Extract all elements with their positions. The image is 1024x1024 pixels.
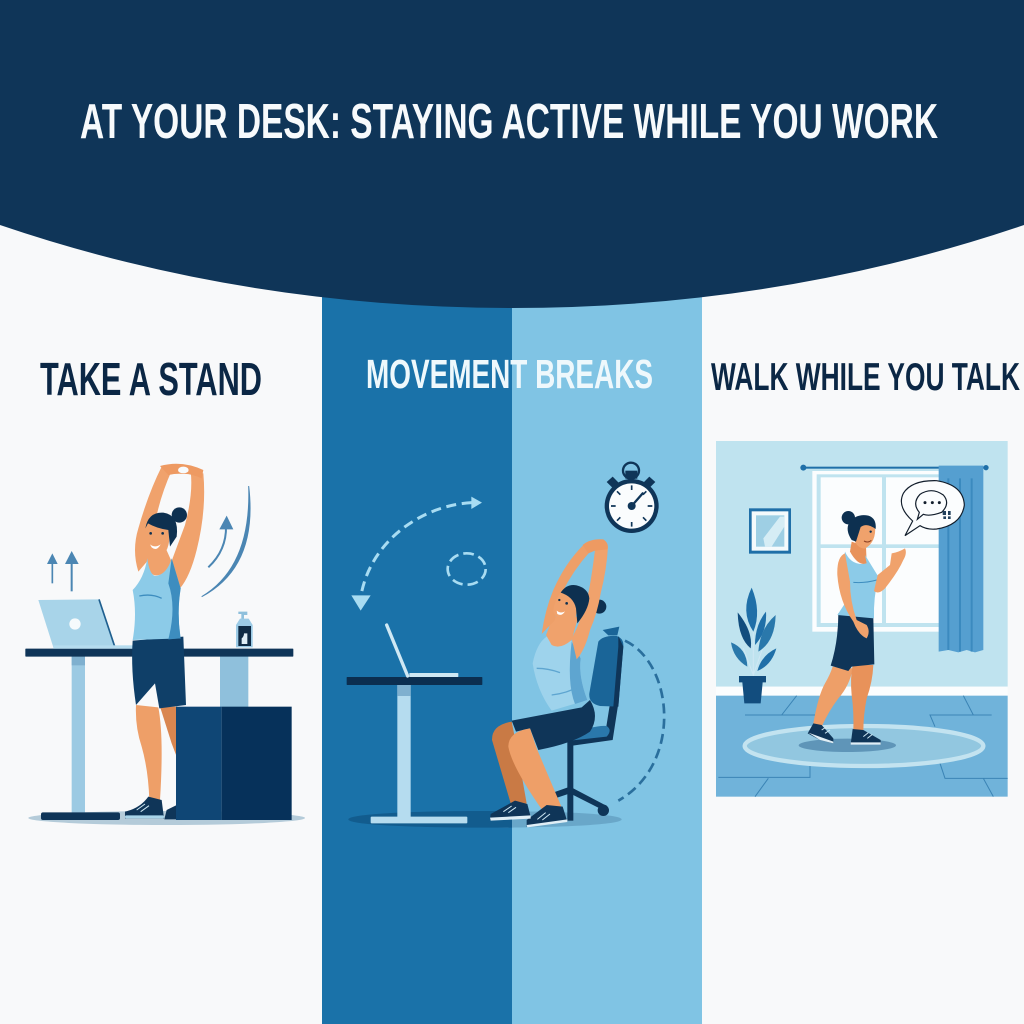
shorts xyxy=(132,637,186,708)
curtain rod xyxy=(800,465,989,471)
laptop xyxy=(387,625,458,677)
shorts xyxy=(831,613,874,671)
back leg xyxy=(160,707,177,758)
icon: dashed return arc xyxy=(618,641,664,801)
left arm xyxy=(542,545,590,634)
shoes xyxy=(125,797,164,818)
office chair xyxy=(537,627,623,821)
shorts xyxy=(512,700,595,750)
woman walking xyxy=(808,511,906,745)
panel: movement breaks dark half xyxy=(322,250,512,1024)
storage cube xyxy=(176,707,292,820)
head xyxy=(853,520,875,549)
icon: stopwatch xyxy=(605,463,659,533)
icon: motion swoosh arrows xyxy=(202,486,250,597)
chest xyxy=(546,617,578,647)
panel: movement breaks light half xyxy=(512,250,702,1024)
baseboard xyxy=(716,687,1008,696)
illustration: seated stretch xyxy=(347,463,664,828)
tank top xyxy=(533,637,587,711)
raised arm xyxy=(874,548,906,592)
illustration: standing desk stretch xyxy=(25,464,305,825)
standing desk xyxy=(25,649,293,820)
woman stretching xyxy=(125,464,204,819)
desk xyxy=(347,677,482,823)
floor shadow xyxy=(348,811,622,828)
header banner xyxy=(0,0,1024,308)
front leg xyxy=(136,705,162,800)
lower arm xyxy=(837,553,869,638)
neck xyxy=(850,542,867,564)
round rug xyxy=(745,726,983,766)
framed picture xyxy=(749,508,791,554)
front leg xyxy=(508,728,562,812)
shoes xyxy=(808,723,833,743)
woman seated stretching xyxy=(490,539,608,827)
tank top xyxy=(837,552,878,618)
window xyxy=(812,471,941,632)
floor shadow xyxy=(28,811,305,825)
icon: pump bottle xyxy=(236,612,253,647)
head xyxy=(553,591,577,621)
heading: take a stand: TAKE A STAND xyxy=(40,353,262,405)
speech bubble xyxy=(901,481,964,536)
right arm xyxy=(572,547,608,659)
back leg xyxy=(492,722,527,807)
icon: dashed circle xyxy=(448,553,486,585)
curtain xyxy=(939,466,983,652)
legs xyxy=(813,667,853,727)
laptop xyxy=(38,599,155,649)
floor xyxy=(716,696,1008,797)
wall xyxy=(716,441,1008,687)
head xyxy=(145,517,169,557)
tank top xyxy=(133,558,181,640)
icon: dashed rotation arrow xyxy=(351,497,482,611)
arms xyxy=(135,467,172,572)
floor shadow xyxy=(799,739,896,752)
heading: movement breaks: MOVEMENT BREAKS xyxy=(366,351,653,397)
icon: up arrows xyxy=(47,551,79,591)
neck xyxy=(147,547,172,575)
shoes xyxy=(490,801,531,820)
hands xyxy=(583,539,608,553)
bun xyxy=(592,600,606,614)
potted plant xyxy=(731,588,776,703)
panel: walking room scene xyxy=(716,441,1008,797)
